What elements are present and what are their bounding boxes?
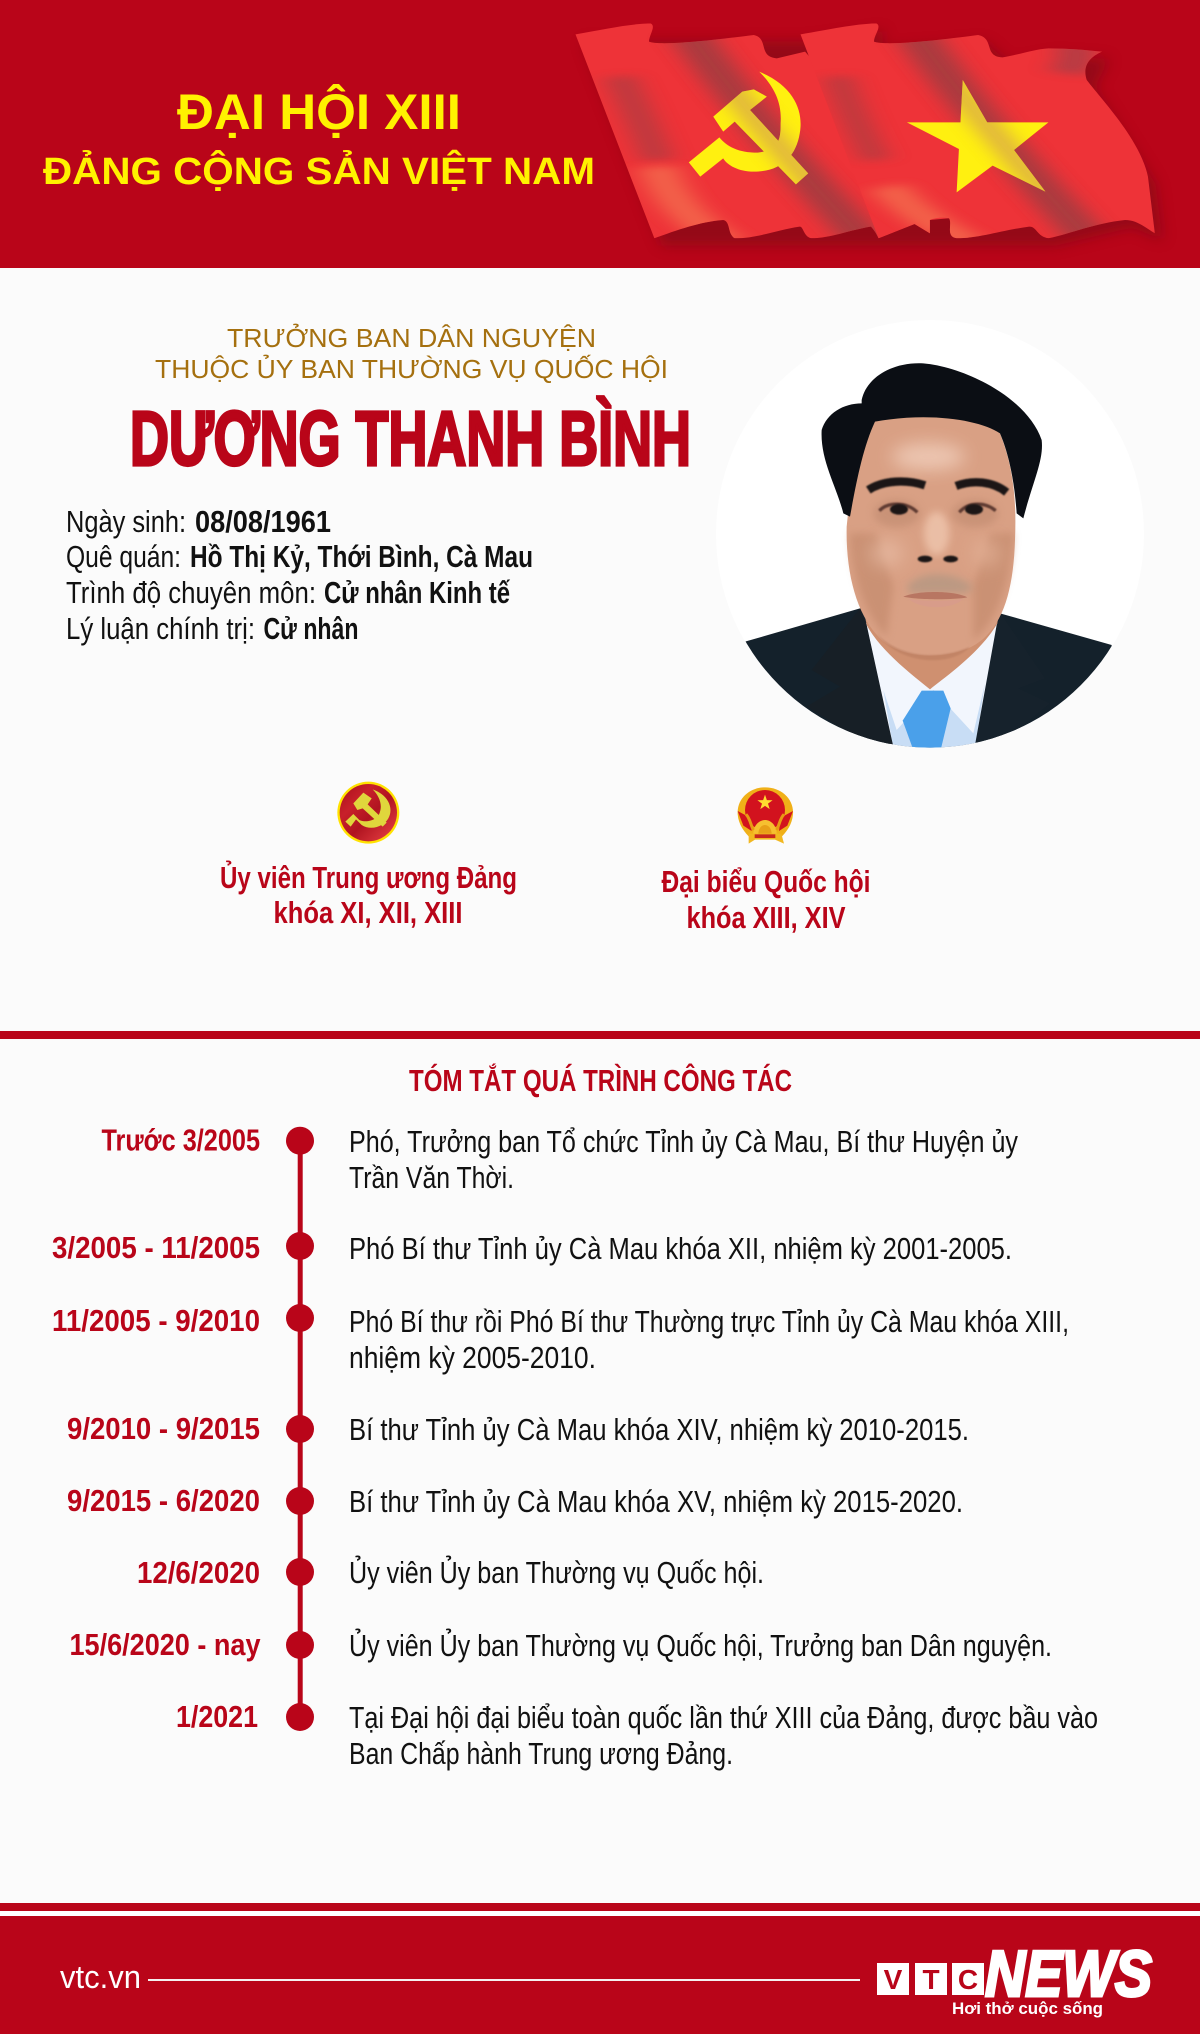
central committee membership	[220, 782, 517, 930]
personal details: Quê quán:	[66, 539, 181, 574]
eyes	[879, 504, 917, 512]
timeline	[52, 1122, 1098, 1771]
icon: hammer	[713, 89, 808, 184]
entry: 3/2005 - 11/2005: 3/2005 - 11/2005	[52, 1230, 260, 1265]
personal details: Trình độ chuyên môn:	[66, 575, 316, 610]
section heading: TÓM TẮT QUÁ TRÌNH CÔNG TÁC	[409, 1062, 792, 1098]
nose highlight	[924, 512, 949, 555]
entry: 15/6/2020 - now: Ủy viên Ủy ban Thường vụ Quốc hội, Trưởng ban Dân nguyện.	[349, 1627, 1052, 1663]
section divider	[0, 1031, 1200, 1039]
portrait circle background	[716, 320, 1144, 748]
VTC News logo: C	[958, 1964, 978, 1995]
personal details: 08/08/1961	[195, 504, 331, 539]
personal details: Lý luận chính trị:	[66, 611, 255, 646]
entry: 12/6/2020	[137, 1554, 764, 1590]
national assembly membership: Đại biểu Quốc hội	[662, 864, 870, 899]
central committee membership: khóa XI, XII, XIII	[274, 895, 462, 930]
national assembly membership	[662, 787, 870, 935]
entry: 9/2010 - 9/2015: 9/2010 - 9/2015	[67, 1411, 260, 1446]
icon: party emblem	[337, 782, 399, 844]
VTC News logo: V	[884, 1964, 903, 1995]
entry: 11/2005 - 9/2010: 11/2005 - 9/2010	[52, 1303, 260, 1338]
timeline axis	[298, 1141, 303, 1717]
hair	[822, 363, 1042, 518]
entry: 9/2015 - 6/2020: Bí thư Tỉnh ủy Cà Mau khóa XV, nhiệm kỳ 2015-2020.	[349, 1484, 963, 1519]
lapels	[842, 624, 893, 744]
chin shadow	[880, 638, 968, 660]
entry: 11/2005 - 9/2010	[52, 1303, 1069, 1375]
entry: 3/2005 - 11/2005: Phó Bí thư Tỉnh ủy Cà Mau khóa XII, nhiệm kỳ 2001-2005.	[349, 1231, 1012, 1266]
neck	[865, 618, 998, 690]
suit	[746, 608, 1112, 748]
entry: before 3/2005: Trước 3/2005	[102, 1122, 260, 1158]
entry: 9/2010 - 9/2015	[67, 1411, 969, 1447]
icon: sickle	[689, 72, 801, 177]
entry: 12/6/2020: 12/6/2020	[137, 1555, 260, 1590]
central committee membership: Ủy viên Trung ương Đảng	[220, 859, 517, 895]
footer rule	[148, 1979, 860, 1981]
entry: 15/6/2020 - now	[70, 1627, 1052, 1663]
personal details: Hồ Thị Kỷ, Thới Bình, Cà Mau	[190, 539, 533, 574]
icon: waving flags with hammer and sickle and star	[566, 20, 1163, 246]
face	[847, 414, 1015, 656]
title: Đại hội XIII	[43, 83, 595, 193]
position heading: TRƯỞNG BAN DÂN NGUYỆN	[227, 322, 596, 353]
entry: before 3/2005: Trần Văn Thời.	[349, 1160, 514, 1195]
entry: 11/2005 - 9/2010: nhiệm kỳ 2005-2010.	[349, 1340, 596, 1375]
header banner	[0, 0, 1200, 268]
VTC News logo: NEWS	[985, 1937, 1152, 2010]
face side shading	[850, 533, 1013, 640]
personal details	[66, 504, 533, 646]
personal details: Cử nhân	[264, 611, 358, 646]
national assembly membership: khóa XIII, XIV	[686, 900, 846, 935]
VTC News logo: Hơi thở cuộc sống	[952, 1999, 1103, 2018]
title: Đại hội XIII: ĐẢNG CỘNG SẢN VIỆT NAM	[43, 148, 595, 193]
name: DƯƠNG THANH BÌNH	[130, 396, 691, 482]
entry: before 3/2005: Phó, Trưởng ban Tổ chức Tỉnh ủy Cà Mau, Bí thư Huyện ủy	[349, 1124, 1018, 1159]
entry: before 3/2005	[102, 1122, 1018, 1195]
icon: star	[907, 80, 1048, 192]
entry: 15/6/2020 - now: 15/6/2020 - nay	[70, 1627, 261, 1662]
VTC News logo: T	[922, 1964, 940, 1995]
entry: 9/2010 - 9/2015: Bí thư Tỉnh ủy Cà Mau khóa XIV, nhiệm kỳ 2010-2015.	[349, 1412, 969, 1447]
position heading: THUỘC ỦY BAN THƯỜNG VỤ QUỐC HỘI	[155, 353, 668, 384]
entry: 3/2005 - 11/2005	[52, 1230, 1012, 1266]
shirt	[866, 623, 997, 748]
forehead highlight	[892, 443, 965, 470]
position heading	[155, 322, 668, 384]
entry: 1/2021	[176, 1699, 1098, 1771]
personal details: Cử nhân Kinh tế	[324, 575, 511, 610]
footer	[0, 1903, 1200, 2034]
mouth	[903, 592, 967, 599]
entry: 1/2021: Ban Chấp hành Trung ương Đảng.	[349, 1736, 733, 1771]
entry: 9/2015 - 6/2020: 9/2015 - 6/2020	[67, 1483, 260, 1518]
title: Đại hội XIII: ĐẠI HỘI XIII	[177, 83, 461, 140]
entry: 1/2021: 1/2021	[176, 1699, 258, 1734]
personal details: Ngày sinh:	[66, 504, 186, 539]
website label: vtc.vn	[60, 1959, 141, 1995]
tie	[903, 691, 951, 750]
entry: 9/2015 - 6/2020	[67, 1483, 963, 1519]
moustache shade	[907, 574, 973, 593]
eyebrows	[868, 481, 925, 490]
entry: 12/6/2020: Ủy viên Ủy ban Thường vụ Quốc hội.	[349, 1554, 764, 1590]
nostrils	[918, 556, 932, 562]
portrait photo	[745, 363, 1112, 767]
VTC News logo	[877, 1937, 1152, 2018]
icon: national emblem	[738, 787, 793, 844]
eye socket shading	[873, 499, 920, 527]
